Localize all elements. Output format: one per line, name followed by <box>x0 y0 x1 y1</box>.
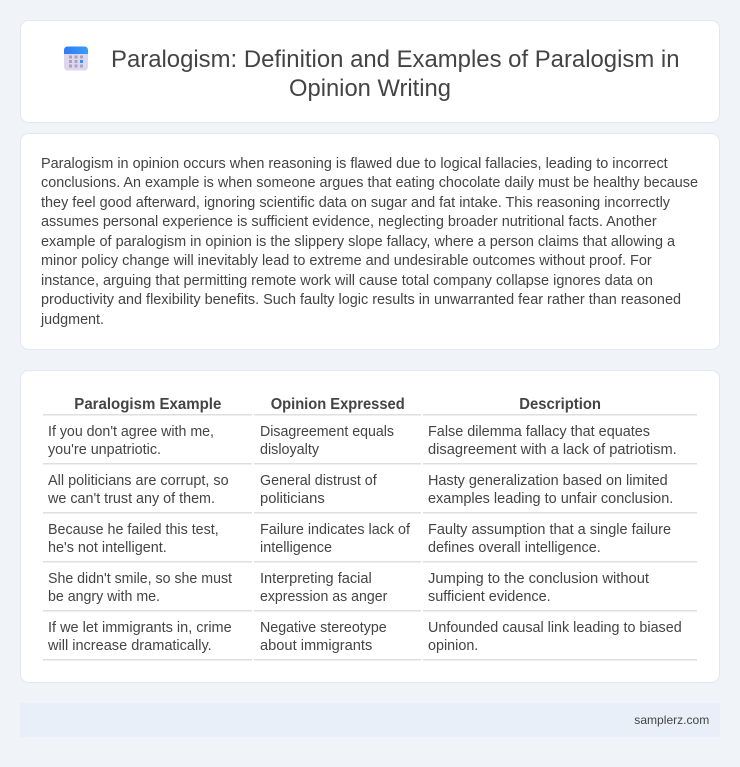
table row 4: be angry with me. <box>48 589 160 605</box>
text block: paragraph: minor policy change will inevitably lead to extreme and undesirable outcomes without proof. For <box>41 253 652 269</box>
table row 3 <box>43 522 697 562</box>
text block: paragraph: instance, arguing that permitting remote work will cause total company collapse ignores data on <box>41 273 653 289</box>
table row 2: General distrust of <box>260 473 378 489</box>
text block: paragraph: conclusions. An example is when someone argues that eating chocolate daily must be healthy because <box>41 175 698 191</box>
footer credit: samplerz.com <box>634 713 709 727</box>
table row 5: opinion. <box>428 638 478 654</box>
table row 1: disagreement with a lack of patriotism. <box>428 442 677 458</box>
title: Opinion Writing <box>289 75 451 102</box>
footer bar <box>20 703 720 737</box>
table row 2: politicians <box>260 491 325 507</box>
table row 5: will increase dramatically. <box>47 638 212 654</box>
table header: Paralogism Example <box>74 396 221 413</box>
table row 2 <box>43 473 697 514</box>
text block: paragraph: judgment. <box>40 312 104 328</box>
table row 3: Faulty assumption that a single failure <box>428 522 671 538</box>
table row 4: Jumping to the conclusion without <box>428 571 649 587</box>
panel: title card <box>20 20 720 122</box>
text block: paragraph: assumes personal experience is sufficient evidence, neglecting broader nutritional facts. Another <box>41 214 657 230</box>
title: Paralogism: Definition and Examples of Paralogism in <box>111 46 680 73</box>
text block: paragraph <box>40 156 698 328</box>
table row 1: If you don't agree with me, <box>48 424 214 440</box>
table row 5: about immigrants <box>260 638 372 654</box>
table row 1: False dilemma fallacy that equates <box>428 424 650 440</box>
panel: table card <box>20 370 720 682</box>
table row 3: intelligence <box>260 540 332 556</box>
table row 2: examples leading to unfair conclusion. <box>428 491 673 507</box>
table row 3: he's not intelligent. <box>48 540 167 556</box>
table row 2: All politicians are corrupt, so <box>48 473 229 489</box>
table row 3: defines overall intelligence. <box>428 540 601 556</box>
table row 4: Interpreting facial <box>260 571 372 587</box>
table header: Description <box>519 396 601 413</box>
table header: Opinion Expressed <box>271 396 405 413</box>
icon: calendar <box>64 46 88 70</box>
table row 4: sufficient evidence. <box>428 589 551 605</box>
table row 3: Because he failed this test, <box>48 522 219 538</box>
table row 4: expression as anger <box>260 589 388 605</box>
table row 1: disloyalty <box>260 442 320 458</box>
title <box>111 46 680 102</box>
table row 5: If we let immigrants in, crime <box>48 620 232 636</box>
text block: paragraph: Paralogism in opinion occurs when reasoning is flawed due to logical fallacies, leading to incorrect <box>41 156 668 172</box>
table row 5 <box>43 620 697 660</box>
table row 1 <box>43 424 697 464</box>
table row 2: Hasty generalization based on limited <box>428 473 668 489</box>
table row 1: Disagreement equals <box>260 424 394 440</box>
table row 4: She didn't smile, so she must <box>48 571 232 587</box>
panel: intro paragraph card <box>20 134 720 350</box>
table row 4 <box>43 571 697 612</box>
text block: paragraph: they feel good afterward, ignoring scientific data on sugar and fat intake. This reasoning incorrectly <box>41 195 671 211</box>
text block: paragraph: productivity and flexibility benefits. Such faulty logic results in unwarranted fear rather than reasoned <box>41 292 681 308</box>
text block: paragraph: example of paralogism in opinion is the slippery slope fallacy, where a person claims that allowing a <box>41 234 675 250</box>
table row 5: Unfounded causal link leading to biased <box>428 620 682 636</box>
table row 3: Failure indicates lack of <box>260 522 411 538</box>
table row 2: we can't trust any of them. <box>47 491 215 507</box>
table header <box>43 396 697 416</box>
table row 1: you're unpatriotic. <box>48 442 161 458</box>
table row 5: Negative stereotype <box>260 620 387 636</box>
